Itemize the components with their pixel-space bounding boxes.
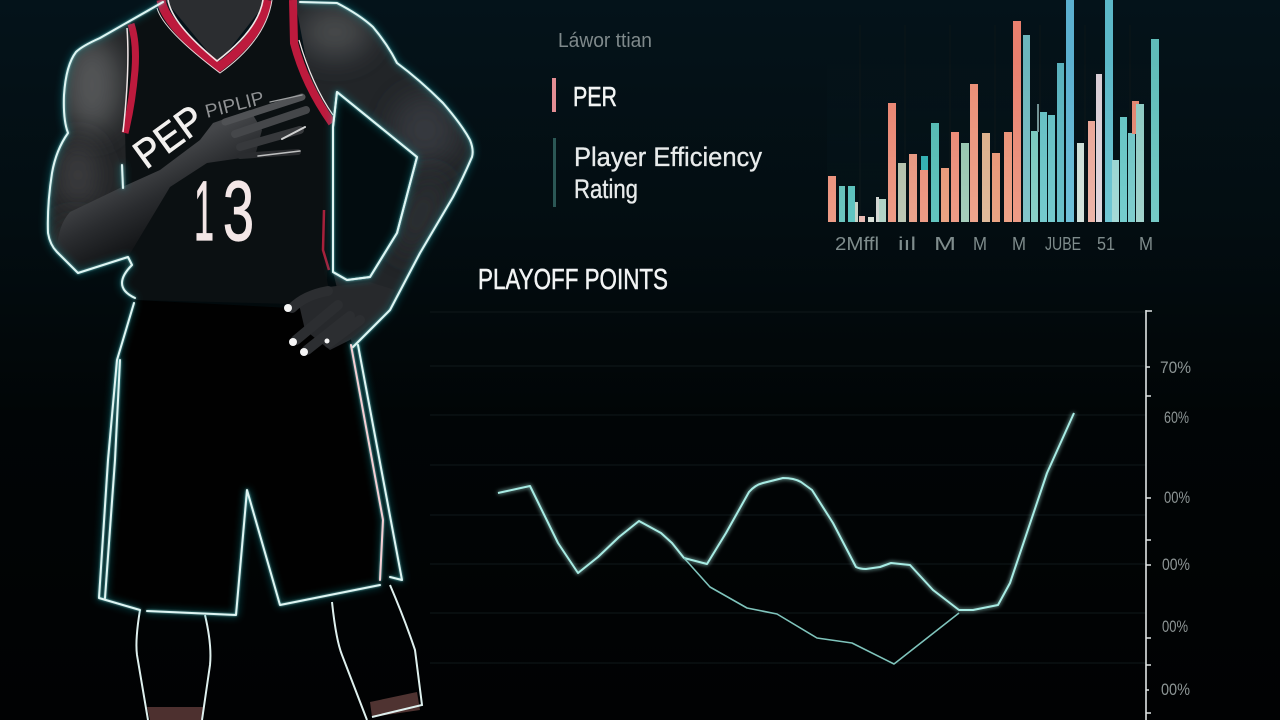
shorts	[99, 300, 402, 614]
right axis	[1146, 310, 1152, 720]
rating description	[574, 142, 762, 204]
chart title: PLAYOFF POINTS	[478, 264, 668, 296]
bar chart axis labels: M	[973, 234, 987, 254]
PER label: PER	[573, 81, 617, 112]
PER swatch	[552, 78, 556, 112]
right axis labels	[1160, 358, 1191, 699]
bar chart axis labels: 2Mffl	[835, 234, 879, 254]
jersey lettering: PEP	[125, 97, 213, 177]
rating description: Player Efficiency	[574, 142, 762, 172]
right lower leg	[332, 585, 422, 720]
jersey number: 3	[223, 164, 254, 258]
player figure	[40, 0, 485, 720]
bar chart axis labels: M	[934, 234, 956, 254]
bar chart axis labels: JUBE	[1045, 234, 1081, 254]
left arm	[49, 11, 150, 254]
upper playoff points line	[498, 413, 1074, 610]
bar chart axis labels: 51	[1097, 234, 1115, 254]
rating swatch	[553, 138, 556, 207]
right arm	[297, 0, 472, 346]
forearm and chest hand	[57, 95, 306, 273]
bar chart axis labels: M	[1139, 234, 1153, 254]
right axis labels: 60%	[1164, 408, 1189, 427]
jersey small lettering: PIPLIP	[203, 88, 266, 123]
player illustration	[42, 0, 478, 720]
rating description: Rating	[574, 174, 638, 204]
bars	[828, 0, 1159, 222]
right axis labels: 70%	[1160, 358, 1191, 377]
neon body outline	[48, 2, 473, 615]
right axis labels: 00%	[1164, 488, 1190, 507]
jersey arm trim	[123, 0, 333, 270]
right axis labels: 00%	[1161, 680, 1190, 699]
hip hand	[284, 282, 395, 356]
lower playoff points line	[684, 558, 959, 664]
left lower leg	[136, 610, 210, 720]
right axis labels: 00%	[1162, 617, 1188, 636]
jersey number: 1	[194, 164, 214, 258]
jersey	[122, 0, 333, 305]
neck collar	[157, 0, 272, 73]
bar chart axis labels: M	[1012, 234, 1026, 254]
neck	[165, 0, 268, 64]
legend caption: Láwor ttian	[558, 30, 652, 52]
bar chart axis labels: iıl	[898, 234, 916, 254]
bar chart axis labels	[835, 234, 1153, 254]
right axis labels: 00%	[1162, 555, 1190, 574]
gap between right arm and torso	[333, 92, 417, 280]
